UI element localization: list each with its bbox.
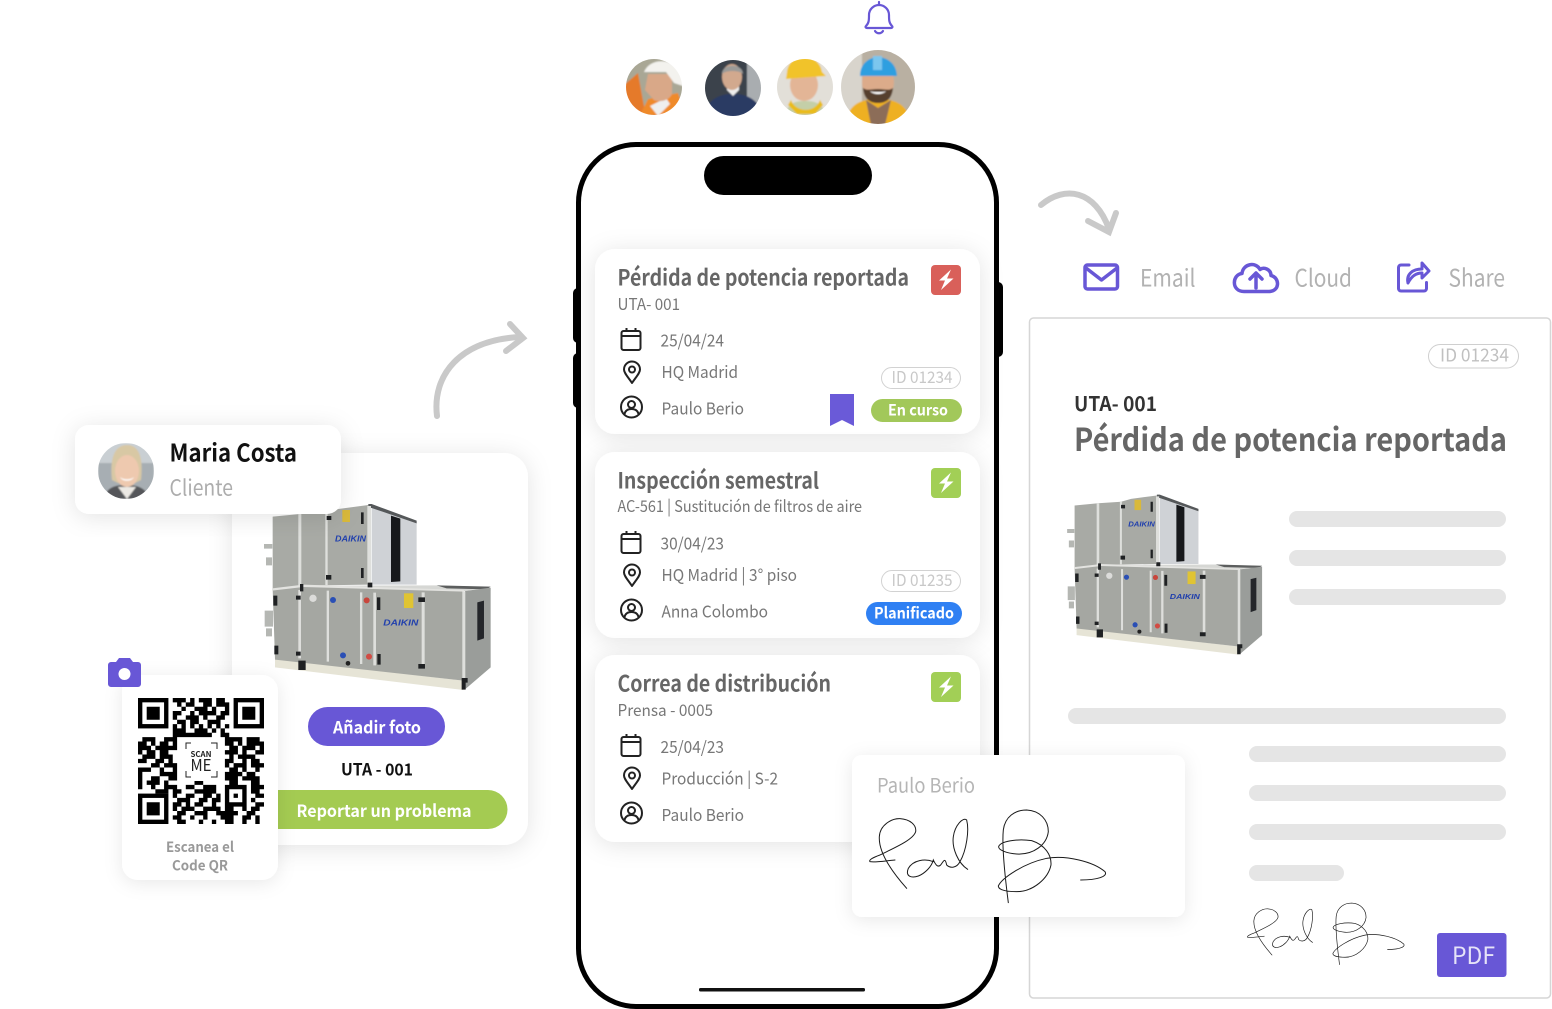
cloud label: Cloud — [1294, 258, 1352, 294]
panel: signature popup — [852, 755, 1185, 917]
id pill: ID 01235 — [892, 567, 953, 591]
QR caption: Code QR — [172, 856, 228, 876]
icon: pin — [624, 362, 640, 383]
signer name: Paulo Berio — [877, 770, 975, 798]
card 3 subtitle: Prensa - 0005 — [618, 697, 713, 721]
equipment image: DAIKIN — [383, 619, 419, 628]
document equipment image: DAIKIN — [1170, 594, 1201, 601]
QR centre mark — [180, 739, 222, 781]
phone frame — [578, 144, 996, 1006]
avatar: man in navy shirt — [705, 60, 761, 116]
icon: calendar — [622, 531, 640, 553]
client name: Maria Costa — [170, 434, 297, 468]
arrow: to exports — [1041, 194, 1116, 232]
avatar: man in blue helmet — [840, 49, 916, 125]
card 2 assignee: Anna Colombo — [662, 598, 768, 622]
signature — [870, 810, 1106, 903]
panel: report card 3 — [595, 655, 980, 842]
icon: camera — [108, 658, 141, 687]
card 3 title: Correa de distribución — [618, 666, 831, 698]
PDF badge: PDF — [1452, 936, 1495, 971]
card 2 location: HQ Madrid | 3° piso — [662, 562, 797, 586]
icon: red bolt — [931, 265, 961, 295]
card 2 date: 30/04/23 — [660, 530, 724, 554]
document equipment image — [1067, 495, 1262, 655]
document subtitle: UTA- 001 — [1074, 388, 1157, 417]
add photo button — [308, 707, 445, 746]
panel: QR card — [122, 675, 278, 880]
QR centre mark: ME — [190, 752, 212, 776]
icon: user — [621, 600, 642, 620]
icon: share — [1398, 263, 1429, 291]
report problem button: Reportar un problema — [296, 797, 472, 822]
document signature — [1247, 903, 1404, 965]
card 1 subtitle: UTA- 001 — [618, 291, 680, 315]
document equipment image: DAIKIN — [1128, 522, 1156, 529]
icon: email — [1085, 265, 1118, 289]
panel: client card — [75, 425, 341, 514]
card 2 subtitle: AC-561 | Sustitución de filtros de aire — [618, 493, 862, 517]
card 1 location: HQ Madrid — [662, 359, 738, 383]
card 1 title: Pérdida de potencia reportada — [618, 260, 909, 292]
card 2 title: Inspección semestral — [618, 464, 819, 496]
icon: calendar — [622, 328, 640, 350]
icon: bookmark — [830, 394, 854, 426]
icon: green bolt — [931, 468, 961, 498]
email label: Email — [1140, 258, 1196, 294]
notification bell icon — [866, 2, 892, 33]
icon: user — [621, 396, 642, 418]
status pill — [871, 398, 962, 422]
panel: report card 1 — [595, 249, 980, 434]
document id pill: ID 01234 — [1440, 342, 1509, 368]
id pill: ID 01234 — [892, 364, 953, 388]
QR caption — [166, 837, 235, 876]
client photo — [98, 443, 154, 499]
icon: green bolt — [931, 672, 961, 702]
equipment label: UTA - 001 — [341, 756, 413, 780]
status pill: Planificado — [874, 602, 954, 624]
card 3 date: 25/04/23 — [660, 734, 724, 758]
QR centre mark: SCAN — [190, 749, 212, 760]
report problem button — [260, 790, 508, 829]
icon: cloud upload — [1234, 265, 1278, 292]
icon: calendar — [622, 734, 640, 756]
document title: Pérdida de potencia reportada — [1074, 415, 1507, 461]
client role: Cliente — [170, 470, 233, 502]
equipment image: DAIKIN — [335, 534, 366, 543]
phone side buttons — [573, 282, 1003, 408]
status pill: En curso — [888, 398, 948, 420]
PDF badge — [1437, 933, 1506, 977]
equipment image — [264, 504, 491, 690]
card 1 date: 25/04/24 — [660, 328, 724, 352]
avatar: worker in white helmet — [626, 59, 682, 115]
card 3 location: Producción | S-2 — [662, 766, 778, 790]
card 1 assignee: Paulo Berio — [662, 396, 744, 420]
phone notch — [704, 156, 872, 195]
phone home bar — [699, 988, 865, 992]
share label: Share — [1448, 258, 1505, 294]
icon: user — [621, 802, 642, 824]
icon: pin — [624, 564, 640, 586]
card 3 assignee: Paulo Berio — [662, 802, 744, 826]
text placeholder bars — [1068, 511, 1506, 881]
QR code — [138, 700, 264, 822]
panel: PDF document — [1030, 318, 1550, 998]
avatar: woman in yellow helmet — [777, 59, 833, 115]
arrow: to phone — [436, 324, 523, 416]
panel: report card 2 — [595, 452, 980, 638]
panel: equipment card — [232, 453, 528, 845]
QR caption: Escanea el — [166, 837, 235, 857]
icon: pin — [624, 768, 640, 789]
add photo button: Añadir foto — [332, 714, 421, 738]
